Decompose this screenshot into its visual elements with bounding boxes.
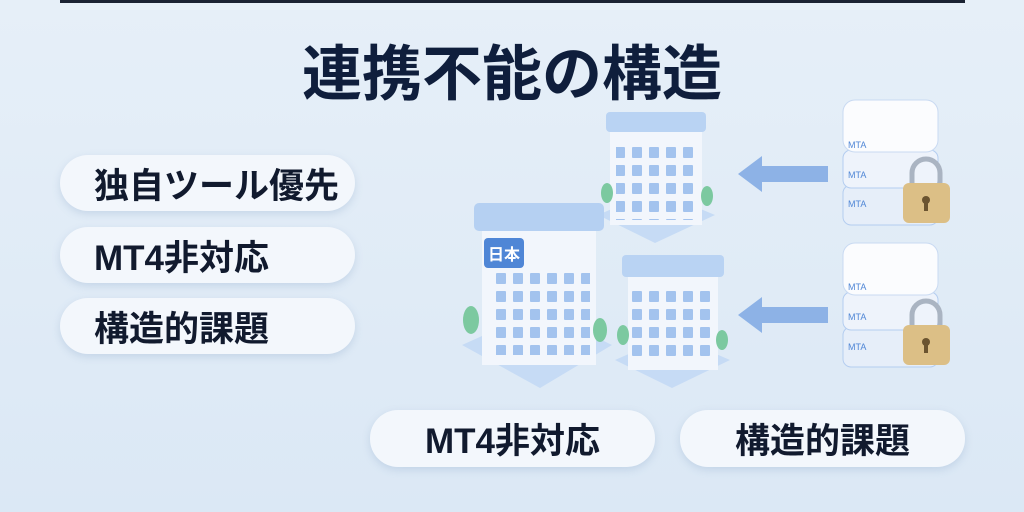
pill: bottom 構造的課題: [680, 410, 965, 467]
pill: 構造的課題: 構造的課題: [94, 310, 269, 348]
pill: 独自ツール優先: [60, 155, 355, 211]
pill: bottom 構造的課題: 構造的課題: [735, 422, 910, 461]
icon: building main 日本: [462, 203, 612, 388]
arrow top: [738, 156, 828, 192]
icon: server top: [843, 100, 938, 225]
icon: server bottom: [843, 243, 938, 367]
pill: MT4非対応: [60, 227, 355, 283]
pill: bottom MT4非対応: [370, 410, 655, 467]
pill: 独自ツール優先: 独自ツール優先: [94, 166, 339, 206]
icon: lock top: [903, 159, 950, 223]
icon: lock bottom: [903, 301, 950, 365]
icon: server bottom: MTA: [848, 342, 866, 352]
icon: server top: MTA: [848, 140, 866, 150]
icon: server bottom: MTA: [848, 312, 866, 322]
pill: 構造的課題: [60, 298, 355, 354]
title: 連携不能の構造: [302, 41, 722, 108]
pill: bottom MT4非対応: MT4非対応: [425, 422, 600, 461]
pill: MT4非対応: MT4非対応: [94, 238, 269, 278]
icon: building main 日本: 日本: [488, 246, 520, 264]
icon: server top: MTA: [848, 199, 866, 209]
icon: server top: MTA: [848, 170, 866, 180]
icon: building top: [598, 112, 715, 243]
arrow bottom: [738, 297, 828, 333]
icon: server bottom: MTA: [848, 282, 866, 292]
icon: building bottom: [615, 255, 730, 388]
